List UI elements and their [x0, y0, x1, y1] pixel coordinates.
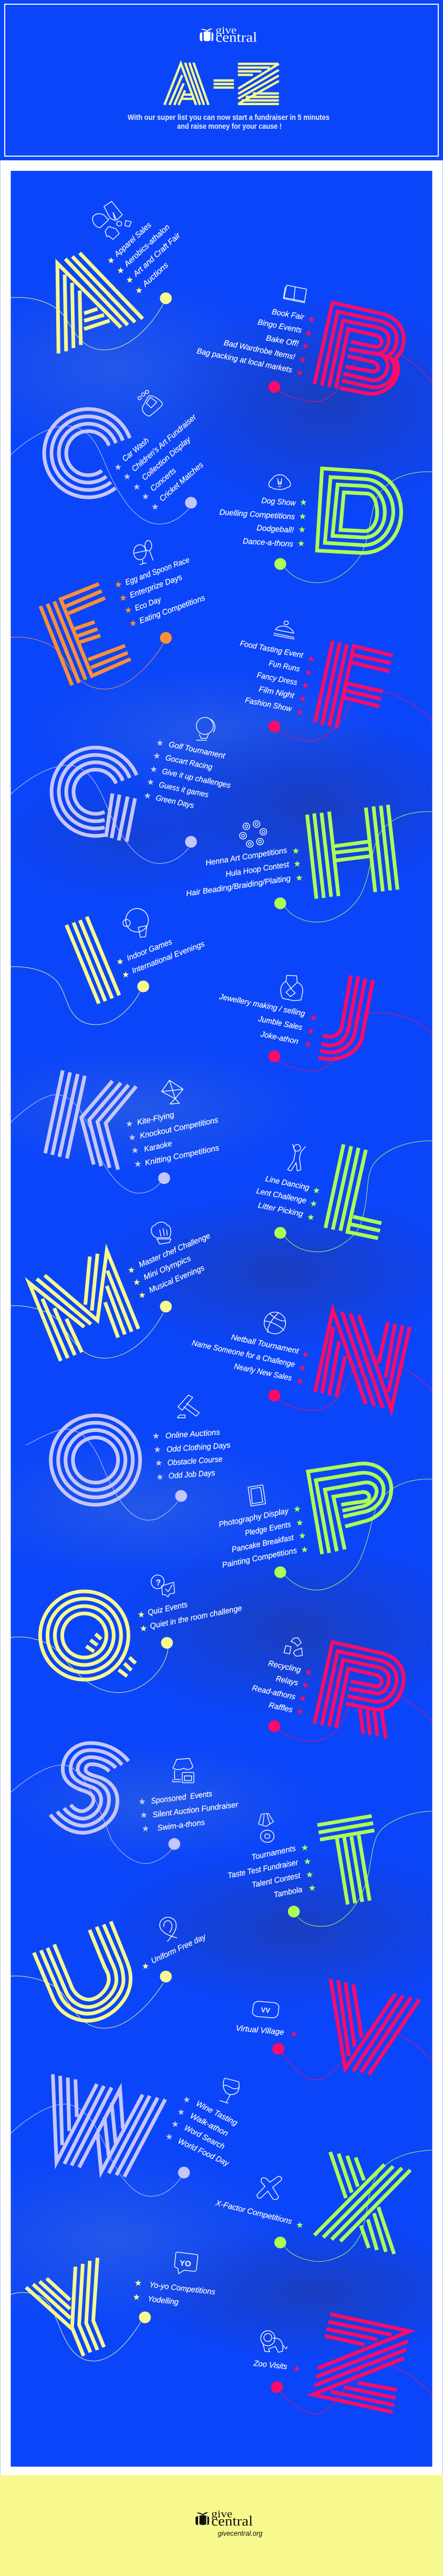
- list: I ideas: International Evenings: [131, 939, 206, 976]
- list: T ideas: Talent Contest: [251, 1871, 302, 1890]
- list: M ideas: Mini Olympics: [142, 1254, 192, 1282]
- panel: Y: [11, 2252, 216, 2361]
- panel: F: [239, 621, 431, 741]
- balloon T: [288, 1906, 300, 1917]
- list: J ideas: Jumble Sales: [257, 1014, 303, 1032]
- panel: A: [11, 201, 182, 353]
- panel: X: [214, 2150, 431, 2262]
- balloon H: [274, 897, 286, 909]
- list: G ideas: Green Days: [155, 793, 195, 810]
- icon: cloche: [273, 621, 294, 639]
- list: T ideas: Taste Test Fundraiser: [227, 1858, 300, 1880]
- connector curve Z: [281, 2363, 431, 2414]
- list: N ideas: Netball Tournament: [230, 1333, 300, 1356]
- icon: stall and calendar: [173, 1759, 194, 1783]
- list: F ideas: Food Tasting Event: [239, 639, 304, 660]
- list: O ideas: [153, 1428, 231, 1480]
- balloon L: [274, 1227, 286, 1239]
- balloon U: [160, 1971, 172, 1982]
- balloon W: [178, 2166, 190, 2179]
- panel: Z: [253, 2314, 431, 2414]
- list: E ideas: Enterprize Days: [128, 573, 183, 600]
- footer panel: [0, 2475, 443, 2576]
- icon: VV badge: VV: [261, 2006, 271, 2015]
- icon: car wash: [138, 390, 162, 416]
- letter W: [53, 2074, 166, 2177]
- connector curve P: [285, 1479, 431, 1590]
- subtitle: [128, 113, 329, 131]
- balloon D: [274, 558, 286, 570]
- balloon Q: [161, 1637, 173, 1649]
- icon: netball: [264, 1312, 286, 1334]
- panel: R: [251, 1638, 431, 1741]
- connector curve J: [279, 1013, 431, 1071]
- letter P: [308, 1464, 392, 1554]
- list: D ideas: Duelling Competitions: [219, 508, 295, 522]
- icon: dog: [269, 475, 291, 489]
- panel: O: [26, 1395, 231, 1520]
- list: Q ideas: Quiet in the room challenge: [149, 1604, 243, 1631]
- letter Z: [313, 2314, 410, 2412]
- list: T ideas: Tambola: [273, 1885, 303, 1899]
- panel: J: [218, 975, 431, 1071]
- balloon B: [269, 381, 280, 393]
- letter D: [317, 468, 401, 553]
- list: S ideas: [139, 1790, 239, 1833]
- list: S ideas: Sponsored Events: [151, 1790, 213, 1806]
- list: R ideas: Raffles: [268, 1701, 294, 1714]
- list: C ideas: Cricket Matches: [158, 460, 205, 503]
- panel: W: [11, 2074, 239, 2196]
- connector curve L: [285, 1141, 431, 1252]
- panel: H: [186, 805, 431, 922]
- icon: YO speech bubble: [174, 2252, 198, 2274]
- balloon S: [168, 1838, 180, 1850]
- balloon J: [269, 1050, 280, 1062]
- list: P ideas: Pancake Breakfast: [231, 1533, 295, 1555]
- list: T ideas: [227, 1844, 315, 1899]
- connector curve S: [11, 1765, 172, 1864]
- balloon R: [269, 1720, 280, 1732]
- list: C ideas: Collection Display: [140, 435, 193, 482]
- icon: book: [283, 285, 306, 303]
- list: Q ideas: Quiz Events: [147, 1600, 189, 1617]
- balloon G: [185, 836, 197, 848]
- panel: M: [11, 1222, 212, 1361]
- letter B: [277, 303, 431, 402]
- icon: wine glass: [220, 2078, 239, 2103]
- connector curve A: [11, 298, 163, 350]
- letter R: [314, 1642, 404, 1739]
- list: B ideas: Bag packing at local markets: [196, 346, 293, 375]
- list: M ideas: Master chef Challenge: [138, 1231, 212, 1270]
- connector curve K: [11, 1095, 160, 1193]
- logo: give central: give: [215, 25, 236, 36]
- letter E: [40, 584, 130, 686]
- panel: D: [219, 468, 431, 582]
- letter G arcs: [51, 748, 137, 836]
- balloon O: [175, 1490, 187, 1502]
- letter M: [29, 1251, 138, 1361]
- connector curve W: [11, 2104, 181, 2196]
- list: H ideas: Hula Hoop Contest: [225, 860, 290, 879]
- panel: G: [11, 718, 232, 863]
- balloon F: [269, 721, 280, 732]
- list: T ideas: Tournaments: [251, 1844, 297, 1862]
- list: P ideas: Pledge Events: [244, 1520, 292, 1538]
- list: P ideas: [218, 1506, 308, 1570]
- list: O ideas: Online Auctions: [165, 1428, 221, 1440]
- letter Y: [26, 2258, 104, 2356]
- connector curve D: [285, 472, 431, 582]
- icon: recycling: [284, 1638, 302, 1656]
- letter Q tail: [86, 1634, 136, 1676]
- panel: T: [227, 1811, 431, 1926]
- list: B ideas: [196, 308, 315, 376]
- list: K ideas: Knockout Competitions: [139, 1116, 219, 1141]
- balloon P: [274, 1566, 286, 1578]
- letter F: [315, 641, 393, 728]
- list: E ideas: [115, 556, 207, 626]
- icon: lion: [261, 2330, 287, 2353]
- letter C: [44, 409, 130, 497]
- list: N ideas: [191, 1333, 308, 1384]
- footer url: givecentral.org: [218, 2529, 263, 2538]
- list: N ideas: Name Someone for a Challenge: [191, 1338, 296, 1369]
- balloon E: [160, 632, 172, 644]
- list: F ideas: Fashion Show: [244, 696, 293, 713]
- icon: necklace: [281, 975, 303, 1001]
- list: W ideas: Wine Tasting: [194, 2099, 239, 2128]
- list: H ideas: [186, 846, 303, 898]
- icon: X: [257, 2176, 282, 2200]
- letter L: [325, 1144, 382, 1238]
- icon: quiz: [151, 1575, 174, 1597]
- panel: L: [255, 1141, 431, 1252]
- panel: V: [235, 1979, 431, 2080]
- letter I: [66, 917, 119, 1004]
- list: J ideas: [218, 992, 317, 1047]
- list: Y ideas: [133, 2279, 216, 2307]
- subtitle: With our super list you can now start a fundraiser in 5 minutes: [128, 113, 329, 122]
- list: Z ideas: Zoo Visits: [253, 2359, 288, 2371]
- list: I ideas: Indoor Games: [126, 937, 173, 963]
- list: E ideas: Eco Day: [133, 595, 163, 613]
- icon: medal: [259, 1814, 274, 1842]
- list: K ideas: Knitting Competitions: [144, 1143, 220, 1168]
- list: R ideas: Recycling: [267, 1659, 302, 1674]
- connector curve H: [285, 812, 431, 922]
- connector curve O: [26, 1429, 178, 1520]
- list: R ideas: Read-athons: [251, 1683, 296, 1702]
- list: D ideas: Dance-a-thons: [243, 537, 294, 549]
- icon: quiz: ?: [156, 1579, 161, 1588]
- list: F ideas: [239, 639, 315, 715]
- panel: K: [11, 1070, 220, 1193]
- list: L ideas: Lent Challenge: [255, 1187, 307, 1205]
- connector curve T: [298, 1811, 431, 1926]
- list: B ideas: Book Fair: [271, 308, 305, 322]
- footer logo: [195, 2508, 253, 2529]
- panel: B: [196, 285, 431, 402]
- list: L ideas: Line Dancing: [264, 1174, 311, 1192]
- balloon A: [160, 292, 172, 304]
- panel: S: [11, 1743, 239, 1864]
- icon: dancer: [287, 1144, 306, 1171]
- list: K ideas: Kite-Flying: [136, 1110, 176, 1127]
- balloon Z: [271, 2381, 283, 2393]
- letter T: [317, 1816, 374, 1905]
- connector curve M: [11, 1306, 163, 1358]
- icon: ribbon: [160, 1917, 177, 1941]
- balloon M: [160, 1301, 172, 1312]
- footer logo: central: [211, 2513, 253, 2529]
- list: D ideas: [219, 496, 307, 549]
- icon: gavel: [178, 1395, 199, 1418]
- list: Y ideas: Yodelling: [147, 2294, 179, 2307]
- list: P ideas: Painting Competitions: [221, 1546, 298, 1570]
- balloon V: [272, 2043, 284, 2054]
- letter N: [315, 1310, 410, 1409]
- connector curve X: [285, 2150, 431, 2262]
- list: B ideas: Bake Off!: [265, 334, 300, 349]
- list: E ideas: Eating Competitions: [138, 594, 207, 626]
- list: L ideas: Litter Picking: [257, 1201, 304, 1219]
- letter V: [331, 1979, 419, 2074]
- list: S ideas: Swim-a-thons: [157, 1818, 205, 1833]
- panel: Q: [11, 1575, 243, 1693]
- list: U ideas: Uniform Free day: [150, 1932, 208, 1966]
- list: A ideas: Auctions: [140, 261, 170, 289]
- letter S: [50, 1743, 129, 1833]
- icon: clothes: [92, 201, 131, 239]
- panel: E: [11, 540, 207, 689]
- letter X: [285, 2150, 431, 2262]
- icon: kite: [162, 1080, 183, 1104]
- connector curve C: [11, 426, 189, 524]
- list: A ideas: Apparel Sales: [112, 220, 153, 259]
- list: O ideas: Odd Clothing Days: [166, 1441, 231, 1454]
- list: N ideas: Nearly New Sales: [233, 1362, 293, 1383]
- list: G ideas: Guess it games: [158, 780, 210, 800]
- balloon X: [274, 2236, 286, 2248]
- list: D ideas: Dodgeball!: [256, 524, 295, 535]
- balloon Y: [139, 2312, 151, 2323]
- list: K ideas: Karaoke: [143, 1139, 173, 1154]
- list: W ideas: [166, 2097, 239, 2169]
- list: X ideas: X-Factor Competitions: [214, 2199, 293, 2226]
- balloon K: [158, 1172, 170, 1184]
- list: C ideas: Children's Art Fundraiser: [130, 412, 199, 474]
- connector curve B: [277, 351, 431, 402]
- list: C ideas: [115, 412, 205, 510]
- panel: C: [11, 390, 205, 524]
- title: A-Z: [164, 63, 279, 105]
- list: Y ideas: Yo-yo Competitions: [149, 2281, 216, 2297]
- list: B ideas: Bad Wardrobe Items!: [223, 339, 296, 362]
- logo: give central: [200, 25, 257, 45]
- icon: VV badge: [252, 2001, 280, 2018]
- panel: I: [11, 908, 206, 1025]
- list: G ideas: Give it up challenges: [161, 767, 232, 790]
- list: B ideas: Bingo Events: [257, 318, 303, 335]
- list: M ideas: [128, 1231, 212, 1298]
- list: M ideas: Musical Evenings: [148, 1263, 206, 1295]
- list: C ideas: Car Wash: [120, 436, 151, 464]
- list: A ideas: [108, 220, 182, 293]
- icon: henna spirals: [240, 821, 267, 847]
- list: G ideas: [144, 740, 232, 810]
- icon: YO speech bubble: YO: [179, 2258, 192, 2269]
- list: O ideas: Obstacle Course: [167, 1455, 223, 1467]
- balloon N: [269, 1389, 280, 1402]
- list: F ideas: Fun Runs: [268, 659, 301, 674]
- icon: table tennis paddle: [123, 908, 148, 937]
- letter A: [57, 253, 143, 353]
- list: W ideas: Word Search: [183, 2123, 226, 2151]
- letter H: [307, 805, 397, 898]
- connector curve I: [11, 967, 140, 1025]
- icon: egg and spoon: [133, 540, 153, 565]
- connector curve Q: [11, 1637, 168, 1693]
- list: D ideas: Dog Show: [261, 496, 296, 508]
- list: J ideas: Jewellery making / selling: [218, 992, 306, 1018]
- list: G ideas: Gocart Racing: [164, 753, 213, 772]
- list: C ideas: Concerts: [149, 466, 178, 493]
- list: W ideas: Walk-athon: [189, 2111, 230, 2138]
- connector curve E: [11, 637, 163, 689]
- connector curve G: [11, 765, 189, 863]
- letter O: [51, 1415, 140, 1505]
- footer logo: give: [211, 2508, 232, 2520]
- connector curve N: [279, 1358, 431, 1410]
- panel: P: [218, 1464, 431, 1590]
- list: O ideas: Odd Job Days: [168, 1468, 215, 1480]
- connector curve F: [279, 691, 431, 741]
- list: A ideas: Aerobics-athalon: [122, 222, 171, 269]
- list: F ideas: Fancy Dress: [256, 671, 298, 687]
- connector curve R: [279, 1689, 431, 1741]
- balloon C: [185, 497, 197, 508]
- list: E ideas: Egg and Spoon Race: [124, 556, 191, 587]
- panel: N: [191, 1310, 431, 1410]
- icon: chef hat: [151, 1222, 171, 1244]
- panel: U: [11, 1917, 208, 2028]
- list: S ideas: Silent Auction Fundraiser: [152, 1800, 239, 1819]
- list: W ideas: World Food Day: [177, 2137, 231, 2169]
- list: J ideas: Joke-athon: [259, 1029, 299, 1046]
- letter G stem: [106, 793, 135, 842]
- letter U: [34, 1921, 131, 2021]
- list: G ideas: Golf Tournament: [168, 740, 226, 761]
- icon: golf ball: [197, 718, 215, 740]
- header panel: [0, 0, 443, 160]
- subtitle: and raise money for your cause !: [177, 122, 282, 131]
- list: F ideas: Film Night: [258, 684, 295, 700]
- list: L ideas: [255, 1174, 320, 1220]
- list: R ideas: [251, 1659, 312, 1715]
- list: R ideas: Relays: [275, 1674, 299, 1688]
- list: P ideas: Photography Display: [218, 1506, 290, 1529]
- connector curve V: [283, 2029, 431, 2080]
- letter K: [45, 1070, 136, 1170]
- list: H ideas: Henna Art Competitions: [205, 846, 288, 867]
- letter J: [318, 975, 373, 1059]
- list: H ideas: Hair Beading/Braiding/Plaiting: [186, 874, 292, 898]
- list: V ideas: Virtual Village: [235, 2024, 284, 2037]
- balloon I: [137, 980, 149, 993]
- list: A ideas: Art and Craft Fair: [131, 231, 182, 279]
- letter Q rings: [40, 1591, 128, 1680]
- logo: give central: central: [215, 29, 257, 45]
- connector curve U: [11, 1976, 163, 2028]
- icon: photo frame: [248, 1485, 265, 1506]
- list: K ideas: [126, 1110, 220, 1168]
- connector curve Y: [11, 2293, 141, 2361]
